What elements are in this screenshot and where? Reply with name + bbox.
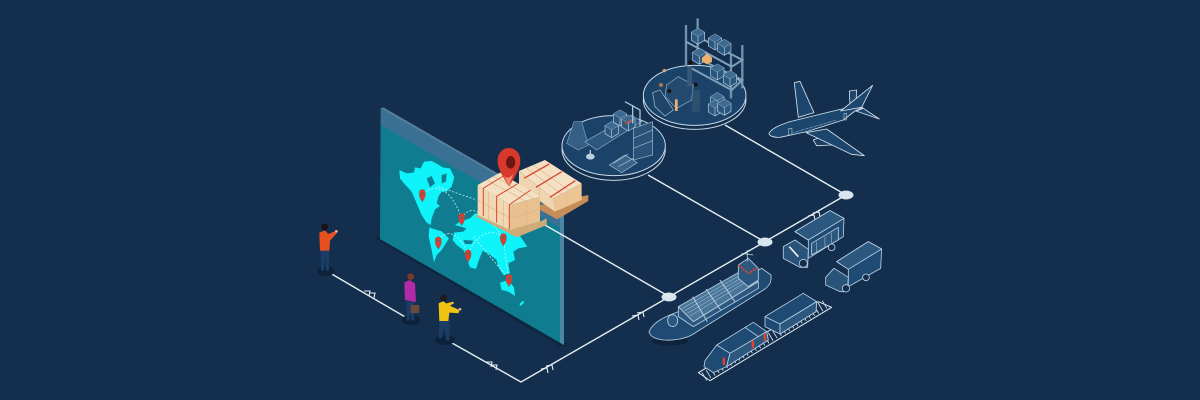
map pins: [419, 189, 512, 287]
airplane: [769, 81, 879, 156]
connector lines: [330, 125, 846, 382]
world map: [399, 161, 527, 306]
person in orange: [317, 224, 338, 276]
box truck: [826, 242, 882, 292]
back pallet of boxes: [519, 160, 588, 219]
map wall panel: [317, 107, 670, 347]
robotics platform: [562, 102, 665, 180]
large location pin: [498, 148, 520, 187]
route lines: [422, 187, 508, 278]
route arrows: [364, 212, 820, 373]
delivery truck with open side: [783, 211, 844, 267]
warehouse and robotics platforms: [562, 18, 879, 180]
container ship: [649, 250, 771, 346]
freight train: [698, 293, 832, 381]
network nodes: [662, 190, 854, 302]
vehicles: [649, 211, 882, 381]
connector from pallet to node: [545, 225, 670, 297]
front pallet of boxes: [475, 173, 547, 237]
person in magenta with briefcase: [402, 273, 420, 325]
person in yellow: [435, 295, 461, 345]
warehouse platform: [643, 18, 746, 129]
